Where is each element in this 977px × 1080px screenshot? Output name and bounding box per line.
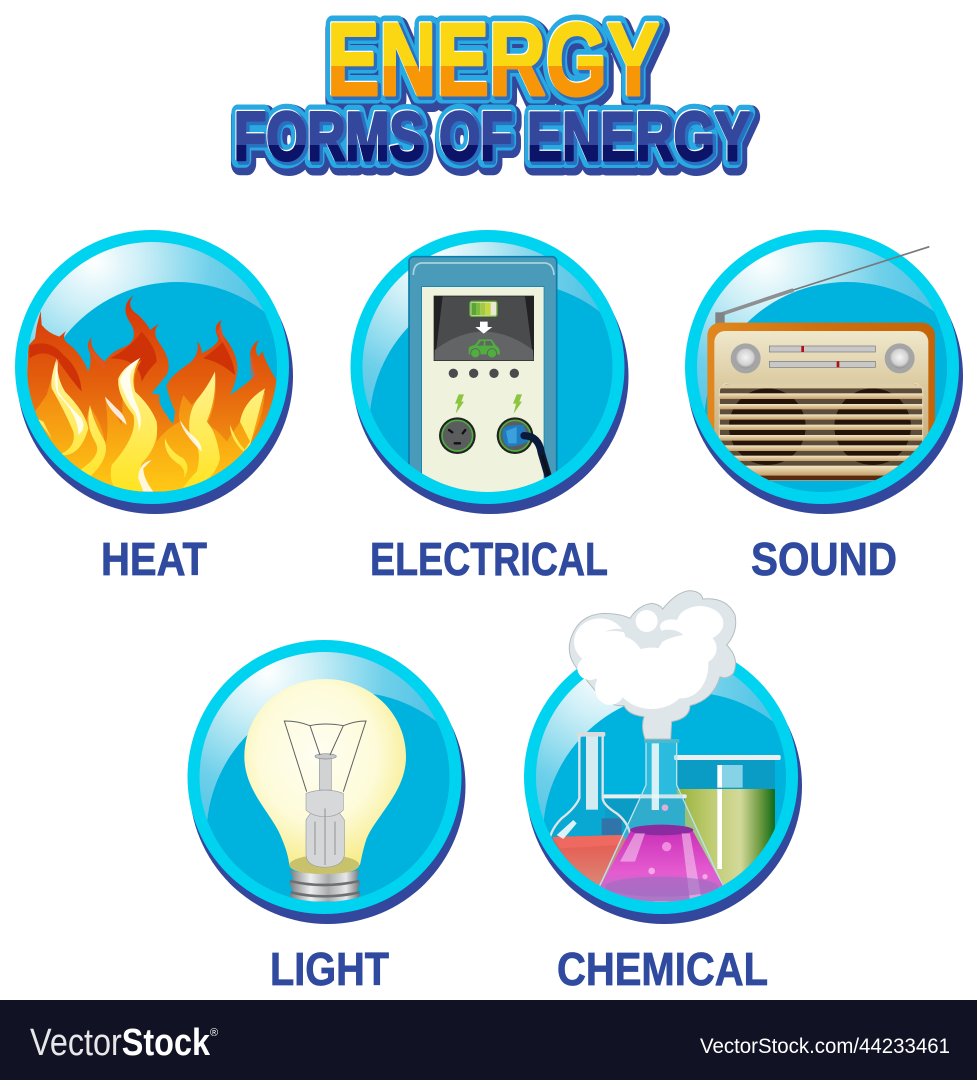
icon: smoke cloud [569, 591, 736, 739]
title line: ENERGY: ENERGY [327, 3, 660, 117]
registered mark: ® [210, 1027, 218, 1039]
footer band [0, 1000, 977, 1080]
title line: FORMS OF ENERGY: FORMS OF ENERGY [234, 98, 750, 176]
title line: FORMS OF ENERGY: FORMS OF ENERGY [236, 102, 752, 180]
label: sound: SOUND [751, 533, 897, 585]
title [233, 2, 752, 180]
title line: ENERGY: ENERGY [327, 3, 660, 117]
panel: electrical [350, 230, 628, 514]
title line: FORMS OF ENERGY: FORMS OF ENERGY [236, 100, 752, 178]
label: heat: HEAT [101, 533, 207, 585]
panel: heat [15, 230, 293, 514]
image id: VectorStock.com/44233461 [700, 1035, 950, 1058]
icon: lab glassware [548, 732, 781, 902]
icon: radio [707, 323, 935, 480]
label: light: LIGHT [270, 943, 389, 995]
title line: ENERGY: ENERGY [329, 5, 662, 119]
logo: VectorStock: VectorStock [30, 1022, 211, 1064]
title line: ENERGY: ENERGY [326, 2, 659, 116]
label: electrical: ELECTRICAL [370, 533, 608, 585]
title line: FORMS OF ENERGY: FORMS OF ENERGY [233, 97, 749, 175]
panel: sound [685, 230, 963, 514]
title line: ENERGY: ENERGY [329, 8, 662, 122]
title line: FORMS OF ENERGY: FORMS OF ENERGY [234, 98, 750, 176]
icon: charging station [409, 257, 557, 513]
icon: flames [27, 296, 277, 492]
label: chemical: CHEMICAL [557, 943, 768, 995]
panel: chemical [524, 590, 802, 924]
icon: radio antenna [715, 247, 929, 324]
panel: light [188, 640, 466, 924]
icon: light bulb [244, 679, 406, 902]
